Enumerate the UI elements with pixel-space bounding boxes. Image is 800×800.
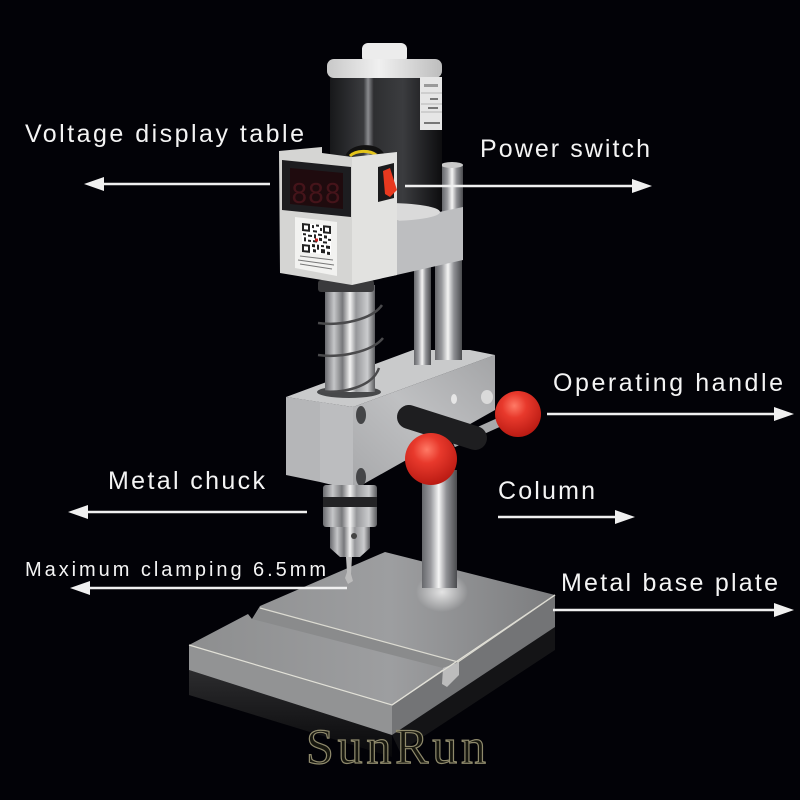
drill press product illustration: [189, 43, 555, 757]
column: [422, 470, 457, 588]
label: metal chuck: Metal chuck: [108, 467, 266, 495]
power switch: [378, 163, 397, 202]
top of column: [441, 162, 463, 215]
label: metal base plate: Metal base plate: [561, 569, 778, 597]
label: maximum clamping: Maximum clamping 6.5mm: [25, 559, 326, 581]
upper bracket: [392, 207, 463, 276]
display housing: [279, 147, 397, 285]
label: power switch: Power switch: [480, 135, 650, 163]
rear twin columns: [414, 255, 462, 365]
label: operating handle: [547, 369, 794, 421]
label: column: [498, 477, 635, 524]
label: metal base plate: [553, 569, 794, 617]
yellow ring: [350, 151, 376, 156]
QR label: [295, 217, 337, 276]
label: maximum clamping: [25, 559, 347, 595]
motor: [327, 43, 442, 221]
chuck: [323, 485, 377, 584]
operating handle: [405, 391, 541, 485]
motor label: [420, 77, 442, 130]
spindle and spring: [317, 280, 383, 398]
watermark: SunRun: SunRun: [306, 718, 486, 774]
label: column: Column: [498, 477, 595, 505]
sliding block: [286, 350, 495, 490]
label: metal chuck: [68, 467, 307, 519]
red ball right: [495, 391, 541, 437]
yellow coil: [348, 148, 382, 156]
voltage display: 888: [291, 178, 341, 213]
base plate: [189, 552, 555, 757]
label: power switch: [405, 135, 652, 193]
label: voltage display table: Voltage display table: [25, 120, 304, 148]
label: operating handle: Operating handle: [553, 369, 783, 397]
label: voltage display table: [25, 120, 304, 191]
red ball left: [405, 433, 457, 485]
